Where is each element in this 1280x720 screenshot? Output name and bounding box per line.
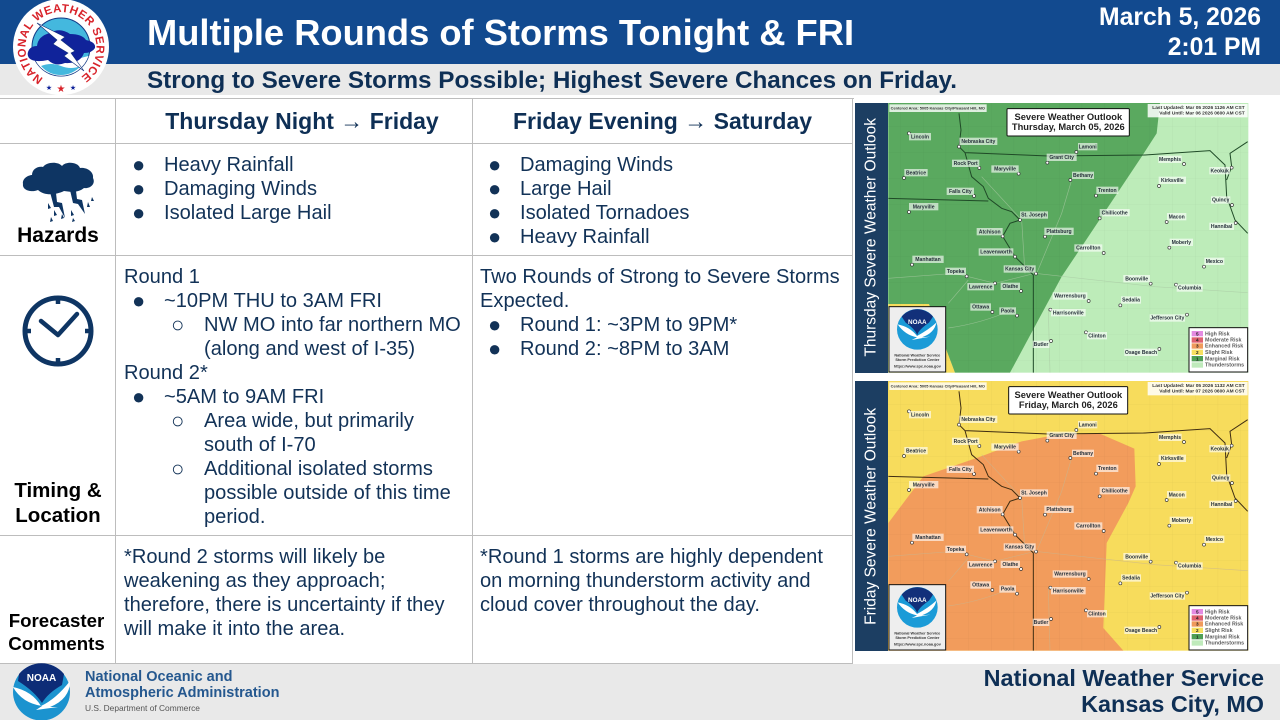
map title box: Severe Weather Outlook: [1015, 390, 1123, 400]
city labels: Harrisonville: [1053, 310, 1084, 316]
hazards list: Thursday Night to Friday: ●: [132, 200, 145, 225]
office name: [984, 665, 1264, 717]
legend: Slight Risk: [1205, 628, 1233, 634]
map title box: [1007, 109, 1129, 136]
legend: 1: [1196, 356, 1199, 361]
legend: 2: [1196, 350, 1199, 355]
risk areas: [888, 103, 1248, 373]
city labels: Carrollton: [1076, 524, 1101, 530]
city labels: Bethany: [1073, 451, 1093, 457]
city labels: Grant City: [1049, 155, 1074, 161]
hazards list: Friday Evening to Saturday: [488, 152, 689, 249]
legend: 1: [1196, 634, 1199, 639]
legend: 4: [1196, 338, 1199, 343]
timing details: Friday Evening to Saturday: Two Rounds of Strong to Severe Storms: [480, 266, 840, 288]
city labels: Keokuk: [1210, 446, 1229, 452]
city labels: Moberly: [1172, 240, 1191, 246]
timing details: Thursday Night to Friday: NW MO into far northern MO: [204, 314, 461, 336]
NOAA logo box: https://www.spc.noaa.gov: [894, 365, 942, 369]
row label: Timing and Location: Location: [15, 504, 101, 527]
icon: National Weather Service logo: ★: [46, 84, 52, 92]
map title box: Severe Weather Outlook: [1015, 112, 1123, 122]
city labels: St. Joseph: [1021, 213, 1047, 219]
timing details: Thursday Night to Friday: ●: [132, 384, 145, 409]
risk areas: [888, 381, 1248, 651]
city labels: Bethany: [1073, 173, 1093, 179]
NOAA logo box: NOAA: [908, 319, 927, 326]
city labels: Plattsburg: [1046, 507, 1072, 513]
city labels: Atchison: [979, 229, 1001, 235]
city labels: Macon: [1169, 214, 1185, 220]
hazards list: Friday Evening to Saturday: Large Hail: [520, 178, 612, 200]
legend: 4: [1196, 616, 1199, 621]
timing details: Thursday Night to Friday: Round 1: [124, 266, 200, 288]
legend: Enhanced Risk: [1205, 622, 1243, 628]
city labels: Maryville: [913, 204, 935, 210]
legend: Slight Risk: [1205, 350, 1233, 356]
icon: National Weather Service logo: ★: [70, 84, 76, 92]
city labels: Kirksville: [1161, 178, 1184, 184]
hazards list: Friday Evening to Saturday: ●: [488, 176, 501, 201]
city labels: [902, 410, 1237, 634]
forecaster comment: Round 1: *Round 1 storms are highly dependent: [480, 546, 823, 568]
row label: Timing and Location: [14, 479, 102, 527]
NOAA name: [85, 669, 279, 701]
timing details: Thursday Night to Friday: ●: [132, 288, 145, 313]
city labels: Butler: [1034, 620, 1048, 626]
map title box: Friday, March 06, 2026: [1019, 400, 1118, 410]
NOAA logo box: https://www.spc.noaa.gov: [894, 643, 942, 647]
city labels: Kirksville: [1161, 456, 1184, 462]
city labels: [902, 132, 1237, 356]
forecaster comment: Round 2: will make it into the area.: [124, 618, 345, 640]
timing details: Thursday Night to Friday: ~10PM THU to 3AM FRI: [164, 290, 382, 312]
timing details: Thursday Night to Friday: period.: [204, 506, 265, 528]
footer band: [0, 664, 1280, 720]
city labels: Lamoni: [1079, 422, 1097, 428]
city labels: Manhattan: [915, 257, 941, 263]
city labels: Lawrence: [969, 284, 993, 290]
timing details: Thursday Night to Friday: possible outside of this time: [204, 482, 451, 504]
timing details: Friday Evening to Saturday: ●: [488, 312, 501, 337]
icon: clock: [22, 296, 94, 366]
city labels: Osage Beach: [1125, 628, 1157, 634]
city labels: Leavenworth: [980, 528, 1012, 534]
subtitle: Strong to Severe Storms Possible; Highest Severe Chances on Friday.: [147, 67, 957, 94]
side label: Thursday Severe Weather Outlook: [855, 103, 888, 373]
legend: Marginal Risk: [1205, 634, 1240, 640]
city labels: Keokuk: [1210, 168, 1229, 174]
icon: NOAA logo: [13, 663, 70, 720]
city labels: Jefferson City: [1150, 594, 1184, 600]
city labels: Moberly: [1172, 518, 1191, 524]
city labels: Warrensburg: [1054, 294, 1086, 300]
row label: Forecaster Comments: [8, 610, 105, 654]
legend: 5: [1196, 331, 1199, 336]
city labels: Hannibal: [1211, 224, 1233, 230]
map title box: Thursday, March 05, 2026: [1012, 122, 1125, 132]
header banner: [0, 0, 1280, 64]
centered area note: [889, 104, 987, 112]
NOAA logo box: Storm Prediction Center: [895, 636, 940, 640]
column heading: Friday Evening to Saturday: Friday Evening → Saturday: [513, 108, 812, 134]
city labels: Beatrice: [906, 448, 926, 454]
update times: Valid Until: Mar 06 2026 0600 AM CST: [1159, 110, 1245, 116]
timing details: Thursday Night to Friday: Area wide, but primarily: [204, 410, 414, 432]
legend: Enhanced Risk: [1205, 344, 1243, 350]
city labels: Rock Port: [954, 161, 978, 167]
city labels: Kansas City: [1005, 267, 1034, 273]
side label: Friday Severe Weather Outlook: [855, 381, 888, 651]
city labels: Clinton: [1088, 333, 1106, 339]
legend: High Risk: [1205, 609, 1230, 615]
office name: Kansas City, MO: [1081, 691, 1264, 717]
city labels: Trenton: [1098, 466, 1117, 472]
legend: [1189, 328, 1248, 372]
department of commerce: U.S. Department of Commerce: [85, 703, 200, 713]
hazards list: Thursday Night to Friday: ●: [132, 176, 145, 201]
NOAA name: National Oceanic and: [85, 669, 232, 685]
timing details: Friday Evening to Saturday: [480, 266, 840, 361]
NOAA logo box: [889, 585, 946, 650]
city labels: Trenton: [1098, 188, 1117, 194]
city labels: Maryville: [994, 167, 1016, 173]
city labels: Quincy: [1212, 198, 1229, 204]
city labels: Columbia: [1178, 286, 1201, 292]
legend: Thunderstorms: [1205, 363, 1244, 369]
date and time: March 5, 2026: [1099, 4, 1261, 31]
forecaster comment: Round 2: weakening as they approach;: [124, 570, 385, 592]
legend: 3: [1196, 622, 1199, 627]
update times: [1148, 104, 1248, 117]
row label: Forecaster Comments: Comments: [8, 633, 105, 654]
city labels: Sedalia: [1122, 298, 1140, 304]
city labels: Rock Port: [954, 439, 978, 445]
date and time: [1099, 4, 1261, 61]
update times: [1148, 382, 1248, 395]
map title box: [1009, 387, 1128, 414]
city labels: St. Joseph: [1021, 491, 1047, 497]
city labels: Grant City: [1049, 433, 1074, 439]
NOAA logo box: Storm Prediction Center: [895, 358, 940, 362]
centered area note: Centered Area: 5005 Kansas City/Pleasant Hill, MO: [891, 105, 985, 110]
city labels: Paola: [1001, 587, 1015, 593]
city labels: Falls City: [949, 467, 972, 473]
city labels: Mexico: [1206, 259, 1223, 265]
city labels: Memphis: [1159, 435, 1181, 441]
legend: 5: [1196, 609, 1199, 614]
legend: 3: [1196, 344, 1199, 349]
update times: Last Updated: Mar 05 2026 1126 AM CST: [1152, 105, 1245, 111]
timing details: Thursday Night to Friday: south of I-70: [204, 434, 316, 456]
NOAA logo box: National Weather Service: [894, 631, 940, 635]
map: Thursday severe weather outlook: [855, 103, 1248, 373]
hazards list: Friday Evening to Saturday: Isolated Tornadoes: [520, 202, 689, 224]
city labels: Warrensburg: [1054, 572, 1086, 578]
NOAA logo box: NOAA: [908, 597, 927, 604]
timing details: Thursday Night to Friday: ○: [171, 312, 184, 337]
city labels: Topeka: [947, 269, 965, 275]
city labels: Nebraska City: [961, 139, 995, 145]
forecaster comment: Round 2: [124, 546, 445, 640]
side label: Friday Severe Weather Outlook: Friday Severe Weather Outlook: [863, 408, 880, 625]
city labels: Lincoln: [911, 412, 929, 418]
forecaster comment: Round 2: *Round 2 storms will likely be: [124, 546, 385, 568]
hazards list: Thursday Night to Friday: [132, 152, 332, 225]
timing details: Thursday Night to Friday: ○: [171, 456, 184, 481]
city labels: Atchison: [979, 507, 1001, 513]
legend: [1189, 606, 1248, 650]
hazards list: Thursday Night to Friday: ●: [132, 152, 145, 177]
city labels: Chillicothe: [1102, 210, 1128, 216]
hazards list: Friday Evening to Saturday: Heavy Rainfall: [520, 226, 650, 248]
subtitle band: [0, 64, 1280, 95]
date and time: 2:01 PM: [1168, 34, 1261, 61]
hazards list: Thursday Night to Friday: Isolated Large Hail: [164, 202, 332, 224]
forecaster comment: Round 1: [480, 546, 823, 616]
icon: storm cloud with lightning and rain: [22, 162, 94, 222]
hazards list: Friday Evening to Saturday: ●: [488, 200, 501, 225]
forecaster comment: Round 1: cloud cover throughout the day.: [480, 594, 760, 616]
row label: Hazards: Hazards: [17, 224, 99, 247]
NOAA name: Atmospheric Administration: [85, 685, 279, 701]
city labels: Falls City: [949, 189, 972, 195]
timing details: Friday Evening to Saturday: ●: [488, 336, 501, 361]
icon: National Weather Service logo: NATIONAL WEATHER SERVICE: [18, 4, 104, 84]
city labels: Topeka: [947, 547, 965, 553]
title: Multiple Rounds of Storms Tonight & FRI: [147, 12, 854, 53]
legend: 2: [1196, 628, 1199, 633]
city labels: Lamoni: [1079, 144, 1097, 150]
city labels: Chillicothe: [1102, 488, 1128, 494]
legend: High Risk: [1205, 331, 1230, 337]
legend: Thunderstorms: [1205, 641, 1244, 647]
city labels: Nebraska City: [961, 417, 995, 423]
map: Friday severe weather outlook: [855, 381, 1248, 651]
side label: Thursday Severe Weather Outlook: Thursday Severe Weather Outlook: [863, 118, 880, 357]
city labels: Mexico: [1206, 537, 1223, 543]
state borders and highways: [888, 391, 1248, 651]
city labels: Lincoln: [911, 134, 929, 140]
timing details: Thursday Night to Friday: (along and west of I-35): [204, 338, 415, 360]
forecaster comment: Round 2: therefore, there is uncertainty if they: [124, 594, 445, 616]
update times: Last Updated: Mar 05 2026 1132 AM CST: [1152, 383, 1245, 389]
timing details: Friday Evening to Saturday: Round 2: ~8PM to 3AM: [520, 338, 729, 360]
centered area note: [889, 382, 987, 390]
timing details: Thursday Night to Friday: ○: [171, 408, 184, 433]
city labels: Jefferson City: [1150, 316, 1184, 322]
city labels: Ottawa: [972, 305, 989, 311]
timing details: Thursday Night to Friday: Round 2*: [124, 362, 208, 384]
legend: Moderate Risk: [1205, 338, 1241, 344]
city labels: Osage Beach: [1125, 350, 1157, 356]
city labels: Manhattan: [915, 535, 941, 541]
city labels: Boonville: [1125, 554, 1148, 560]
city labels: Kansas City: [1005, 545, 1034, 551]
timing details: Friday Evening to Saturday: Round 1: ~3PM to 9PM*: [520, 314, 737, 336]
city labels: Clinton: [1088, 611, 1106, 617]
city labels: Plattsburg: [1046, 229, 1072, 235]
hazards list: Thursday Night to Friday: Damaging Winds: [164, 178, 317, 200]
city labels: Lawrence: [969, 562, 993, 568]
state borders and highways: [888, 113, 1248, 373]
hazards list: Friday Evening to Saturday: ●: [488, 224, 501, 249]
city labels: Harrisonville: [1053, 588, 1084, 594]
icon: National Weather Service logo: ★: [57, 84, 66, 95]
city labels: Ottawa: [972, 583, 989, 589]
forecaster comment: Round 1: on morning thunderstorm activity and: [480, 570, 811, 592]
city labels: Boonville: [1125, 276, 1148, 282]
city labels: Paola: [1001, 309, 1015, 315]
icon: NOAA logo: NOAA: [27, 673, 56, 684]
NOAA logo box: National Weather Service: [894, 353, 940, 357]
city labels: Olathe: [1002, 284, 1018, 290]
row label: Timing and Location: Timing &: [14, 479, 102, 502]
city labels: Maryville: [913, 482, 935, 488]
timing details: Thursday Night to Friday: [124, 266, 461, 528]
city labels: Carrollton: [1076, 246, 1101, 252]
legend: Moderate Risk: [1205, 616, 1241, 622]
hazards list: Thursday Night to Friday: Heavy Rainfall: [164, 154, 294, 176]
city labels: Beatrice: [906, 170, 926, 176]
city labels: Sedalia: [1122, 576, 1140, 582]
city labels: Butler: [1034, 342, 1048, 348]
timing details: Thursday Night to Friday: ~5AM to 9AM FRI: [164, 386, 324, 408]
office name: National Weather Service: [984, 665, 1264, 691]
city labels: Olathe: [1002, 562, 1018, 568]
city labels: Maryville: [994, 445, 1016, 451]
update times: Valid Until: Mar 07 2026 0600 AM CST: [1159, 388, 1245, 394]
row label: Forecaster Comments: Forecaster: [9, 610, 104, 631]
legend: Marginal Risk: [1205, 356, 1240, 362]
city labels: Leavenworth: [980, 250, 1012, 256]
city labels: Macon: [1169, 492, 1185, 498]
column heading: Thursday Night to Friday: Thursday Night → Friday: [165, 108, 439, 134]
panel: forecast table: [0, 98, 854, 664]
NOAA logo box: [889, 307, 946, 372]
city labels: Memphis: [1159, 157, 1181, 163]
centered area note: Centered Area: 5005 Kansas City/Pleasant Hill, MO: [891, 383, 985, 388]
city labels: Quincy: [1212, 476, 1229, 482]
city labels: Hannibal: [1211, 502, 1233, 508]
hazards list: Friday Evening to Saturday: Damaging Winds: [520, 154, 673, 176]
city labels: Columbia: [1178, 564, 1201, 570]
hazards list: Friday Evening to Saturday: ●: [488, 152, 501, 177]
timing details: Friday Evening to Saturday: Expected.: [480, 290, 569, 312]
timing details: Thursday Night to Friday: Additional isolated storms: [204, 458, 433, 480]
